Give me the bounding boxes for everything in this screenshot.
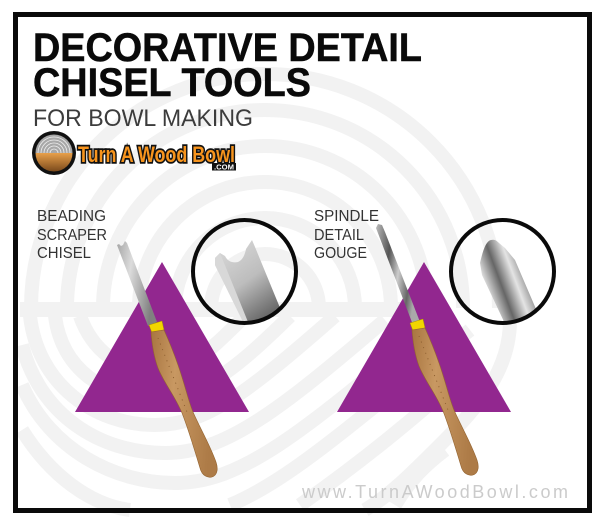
panel: spindle detail gouge bbox=[314, 208, 554, 475]
label: beading scraper chisel bbox=[37, 208, 107, 262]
title: CHISEL TOOLS bbox=[33, 61, 311, 105]
zoom circle: gouge tip bbox=[449, 218, 556, 325]
title bbox=[33, 26, 422, 105]
label: spindle detail gouge bbox=[314, 208, 379, 262]
subtitle: FOR BOWL MAKING bbox=[33, 105, 253, 132]
label: beading scraper chisel: CHISEL bbox=[37, 245, 91, 262]
panel: beading scraper chisel bbox=[37, 208, 296, 477]
tool: spindle detail gouge bbox=[376, 224, 478, 475]
tool: beading scraper chisel bbox=[117, 241, 217, 477]
title: DECORATIVE DETAIL bbox=[33, 26, 422, 70]
background: wood ring watermark bbox=[20, 74, 510, 510]
label: spindle detail gouge: DETAIL bbox=[314, 227, 364, 244]
label: spindle detail gouge: GOUGE bbox=[314, 245, 367, 262]
logo: Turn A Wood Bowl: Turn A Wood Bowl bbox=[78, 142, 235, 167]
website footer: www.TurnAWoodBowl.com bbox=[301, 482, 568, 502]
label: beading scraper chisel: SCRAPER bbox=[37, 227, 107, 244]
zoom circle: chisel tip bbox=[193, 220, 296, 335]
logo: Turn A Wood Bowl bbox=[32, 131, 236, 175]
label: spindle detail gouge: SPINDLE bbox=[314, 208, 379, 225]
logo: Turn A Wood Bowl: .COM bbox=[214, 164, 234, 172]
triangle right bbox=[337, 262, 511, 412]
triangle left bbox=[75, 262, 249, 412]
label: beading scraper chisel: BEADING bbox=[37, 208, 106, 225]
